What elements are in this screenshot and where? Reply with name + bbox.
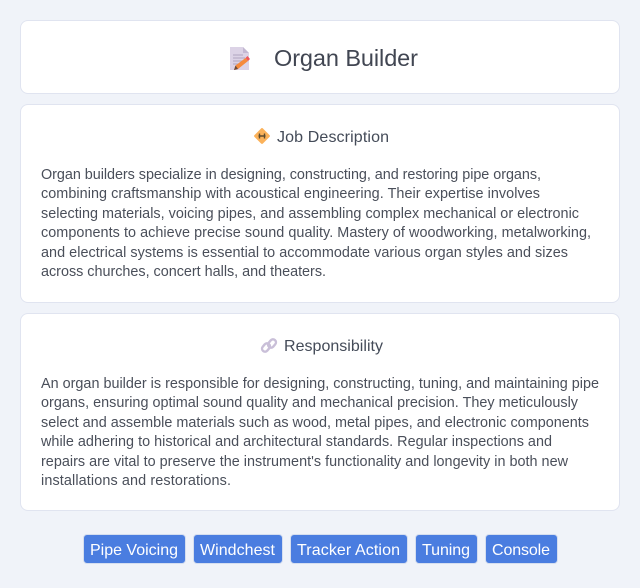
text block: responsibility: installations and restorations. [41, 473, 231, 489]
heading: responsibility: Responsibility [284, 338, 383, 355]
icon: document with pencil [230, 47, 250, 70]
panel: responsibility [20, 313, 620, 511]
text block: job description: combining craftsmanship with acoustical engineering. Their expertise involves [41, 186, 540, 202]
text block: job description [41, 167, 591, 280]
text block: responsibility: repairs are vital to preserve the instrument's functionality and longevity in both new [41, 454, 569, 470]
title: Organ Builder [274, 45, 418, 71]
icon: chain link [260, 338, 278, 353]
tag: Console [485, 534, 558, 564]
tag: Tuning [415, 534, 478, 564]
text block: job description: components to achieve precise sound quality. Mastery of woodworking, metalworking, [41, 225, 591, 241]
tag: Pipe Voicing: Pipe Voicing [90, 542, 178, 559]
tag: Windchest [193, 534, 283, 564]
tag: Tracker Action: Tracker Action [297, 542, 400, 559]
text block: responsibility [40, 376, 599, 489]
tag: Pipe Voicing [83, 534, 186, 564]
text block: responsibility: An organ builder is responsible for designing, constructing, tuning, and maintaining pipe [41, 376, 599, 392]
text block: responsibility: while adhering to historical and architectural standards. Regular inspections and [40, 434, 552, 450]
tag: Console: Console [492, 542, 550, 559]
icon: diamond road sign [254, 128, 270, 144]
panel: title card [20, 20, 620, 94]
tag: Tracker Action [290, 534, 408, 564]
text block: responsibility: select and assemble materials such as wood, metal pipes, and electronic components [41, 415, 589, 431]
text block: job description: and electrical systems is essential to accommodate various organ styles and sizes [41, 245, 568, 261]
text block: job description: selecting materials, voicing pipes, and assembling complex mechanical or electronic [41, 206, 579, 222]
text block: job description: Organ builders specialize in designing, constructing, and restoring pipe organs, [41, 167, 541, 183]
tag: Tuning: Tuning [422, 542, 470, 559]
text block: job description: across churches, concert halls, and theaters. [41, 264, 326, 280]
tag: Windchest: Windchest [200, 542, 276, 559]
text block: responsibility: organs, ensuring optimal sound quality and mechanical precision. They meticulously [41, 395, 579, 411]
heading: job description: Job Description [277, 129, 389, 146]
panel: job description [20, 104, 620, 303]
